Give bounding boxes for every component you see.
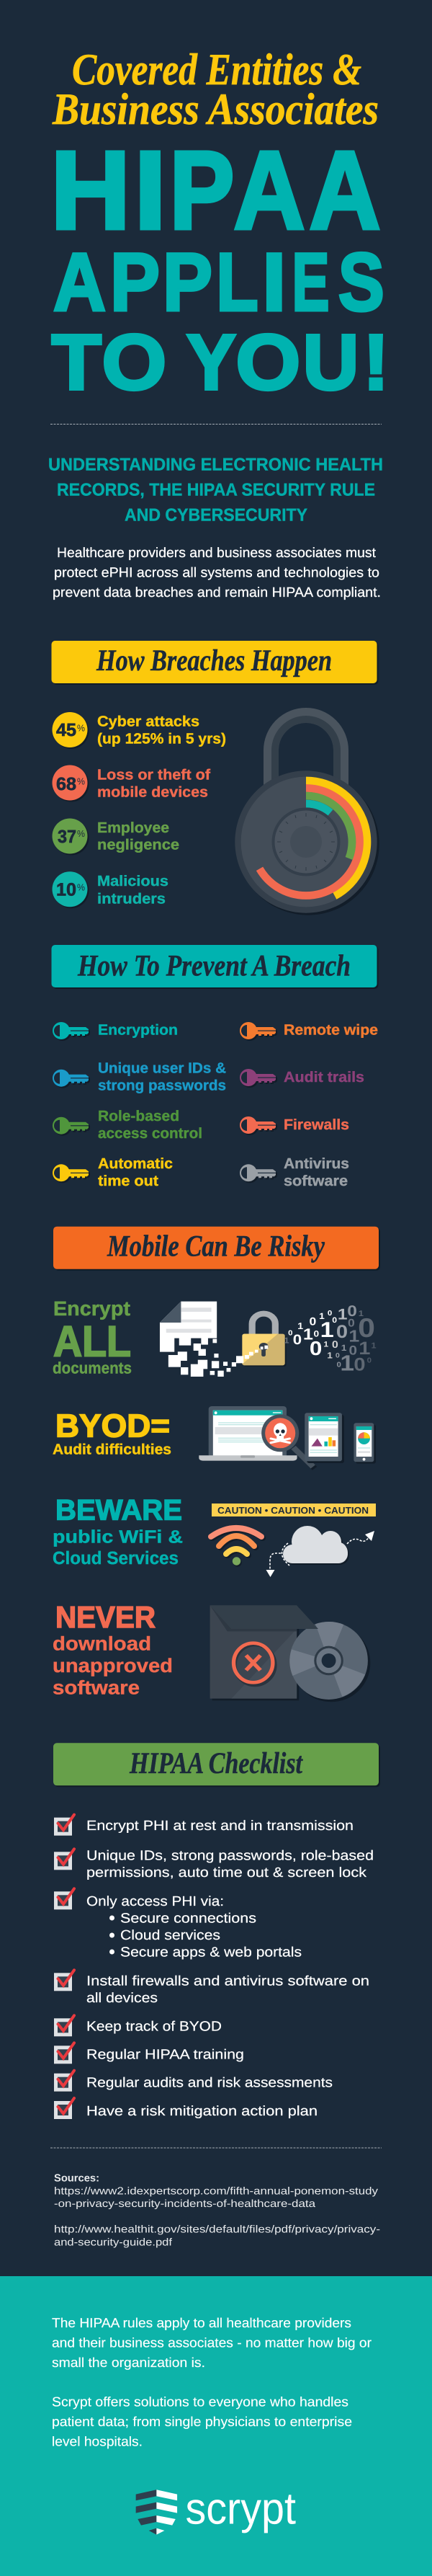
line: APPLIES: I <box>262 236 287 329</box>
line: HIPAA: H <box>50 128 130 252</box>
banner: mobile can be risky: Mobile Can Be Risky <box>107 1230 325 1263</box>
sources: and-security-guide.pdf <box>54 2237 173 2248</box>
text: beware public wifi and cloud services <box>53 1495 183 1568</box>
line: HIPAA: A <box>310 128 380 252</box>
checklist item: mitigation plan: Have a risk mitigation action plan <box>86 2104 318 2119</box>
caution band: CAUTION • CAUTION • CAUTION <box>217 1505 369 1516</box>
line: HIPAA <box>50 128 380 252</box>
checklist item: only access PHI via: Secure connections <box>120 1911 256 1926</box>
footer text: The HIPAA rules apply to all healthcare providers <box>52 2315 351 2330</box>
icon: wifi signal <box>211 1528 263 1567</box>
checklist item: firewalls and antivirus: Install firewalls and antivirus software on <box>86 1973 369 1989</box>
intro paragraph: Healthcare providers and business associates must <box>57 546 377 561</box>
stat: loss or theft 68%: % <box>77 776 85 787</box>
stat: employee negligence 37%: negligence <box>97 837 179 853</box>
sources: https://www2.idexpertscorp.com/fifth-annual-ponemon-study <box>54 2185 379 2197</box>
binary digits: 1 <box>341 1343 346 1353</box>
icon: document turning into encrypted binary <box>160 1302 377 1377</box>
binary digits: 0 <box>354 1354 366 1374</box>
binary digits: 0 <box>367 1356 372 1364</box>
key item: encryption <box>53 1021 178 1041</box>
binary digits: 1 <box>303 1325 313 1343</box>
cloud shape <box>284 1527 349 1565</box>
box <box>210 1605 299 1700</box>
line: APPLIES: S <box>338 236 384 329</box>
text: beware public wifi and cloud services: Cloud Services <box>53 1548 179 1568</box>
checklist item: audits <box>54 2071 333 2092</box>
binary digits <box>284 1302 377 1375</box>
subtitle: UNDERSTANDING ELECTRONIC HEALTH <box>48 455 383 474</box>
checklist item: audits: Regular audits and risk assessments <box>86 2076 333 2091</box>
binary digits: 0 <box>358 1313 375 1343</box>
binary digits: 1 <box>348 1327 359 1346</box>
box flap <box>210 1605 318 1629</box>
intro paragraph: protect ePHI across all systems and technologies to <box>54 565 379 581</box>
binary digits: 1 <box>320 1318 334 1342</box>
text: never download unapproved software: download <box>53 1633 151 1654</box>
sources: Sources: <box>54 2173 99 2185</box>
stat: employee negligence 37% <box>52 819 179 855</box>
checklist item: unique IDs: Unique IDs, strong passwords, role-based <box>86 1849 374 1864</box>
key item: remote wipe <box>240 1021 378 1041</box>
key item: remote wipe: Remote wipe <box>284 1021 378 1038</box>
intro paragraph: prevent data breaches and remain HIPAA compliant. <box>53 585 381 600</box>
line: TO YOU! <box>52 319 389 407</box>
banner: mobile can be risky <box>53 1227 380 1271</box>
stat: malicious intruders 10%: 10 <box>56 880 76 900</box>
key item: unique user IDs <box>53 1060 226 1094</box>
magnifier with skull <box>261 1414 315 1468</box>
checklist item: training <box>54 2043 244 2064</box>
checklist item: only access PHI via: Secure apps & web portals <box>120 1945 302 1960</box>
line: APPLIES: L <box>216 236 258 329</box>
text: BYOD audit difficulties <box>53 1407 171 1458</box>
key item: role-based access control <box>53 1108 202 1142</box>
binary digits: 1 <box>340 1351 354 1375</box>
binary digits: 1 <box>338 1305 348 1323</box>
binary digits: 0 <box>288 1329 293 1337</box>
line: HIPAA: P <box>170 128 235 252</box>
stat: malicious intruders 10%: % <box>77 882 85 893</box>
checklist item: only access PHI via: Cloud services <box>120 1928 220 1943</box>
checklist item: only access PHI via <box>54 1888 302 1960</box>
footer text: level hospitals. <box>52 2433 143 2448</box>
sources <box>54 2173 380 2248</box>
stat: cyber attacks 45% <box>52 712 226 749</box>
logo: scrypt shield <box>136 2490 177 2535</box>
line: TO YOU!: ! <box>363 319 389 407</box>
disc <box>289 1622 370 1702</box>
banner: how breaches happen: How Breaches Happen <box>96 644 332 678</box>
key item: automatic time out: Automatic <box>98 1155 173 1172</box>
key item: unique user IDs: Unique user IDs & <box>98 1060 226 1077</box>
checklist item: firewalls and antivirus: all devices <box>86 1991 158 2006</box>
pixels over padlock <box>236 1346 268 1363</box>
icon: padlock with breach arcs <box>235 716 379 915</box>
binary digits: 0 <box>310 1338 322 1359</box>
key item: audit trails <box>240 1069 364 1088</box>
banner: HIPAA checklist: HIPAA Checklist <box>129 1747 303 1780</box>
stat: malicious intruders 10%: Malicious <box>97 873 168 889</box>
text: beware public wifi and cloud services: public WiFi & <box>53 1527 183 1547</box>
checklist item: encrypt PHI: Encrypt PHI at rest and in transmission <box>86 1818 354 1834</box>
title: covered entities and business associates <box>52 45 379 134</box>
banner: how to prevent a breach: How To Prevent A Breach <box>77 949 351 982</box>
footer text: Scrypt offers solutions to everyone who handles <box>52 2394 348 2410</box>
stat: loss or theft 68%: Loss or theft of <box>97 766 210 783</box>
key item: antivirus software: Antivirus <box>284 1155 349 1172</box>
icon: laptop tablet phone with skull magnifier <box>199 1406 376 1468</box>
breach percentage arcs <box>259 781 367 896</box>
key item: role-based access control: access control <box>98 1125 202 1142</box>
binary digits: 1 <box>327 1350 333 1360</box>
sources: http://www.healthit.gov/sites/default/files/pdf/privacy/privacy- <box>54 2224 380 2236</box>
stat: malicious intruders 10% <box>52 871 168 908</box>
footer text <box>52 2315 372 2448</box>
line: TO YOU!: U <box>302 319 359 407</box>
shredded document <box>160 1302 217 1352</box>
title: covered entities and business associates: Covered Entities & <box>72 45 361 94</box>
binary digits: 0 <box>309 1315 316 1328</box>
title: covered entities and business associates: Business Associates <box>52 85 379 134</box>
key item: firewalls: Firewalls <box>284 1116 349 1133</box>
pixel fragments <box>168 1339 236 1377</box>
stat: cyber attacks 45%: 45 <box>56 720 76 740</box>
key item: automatic time out <box>53 1155 173 1189</box>
stat: employee negligence 37%: % <box>77 828 85 839</box>
icon: software box and disc <box>210 1605 370 1702</box>
sources: -on-privacy-security-incidents-of-healthcare-data <box>54 2198 316 2210</box>
key item: audit trails: Audit trails <box>284 1069 364 1085</box>
line: HIPAA: I <box>134 128 166 252</box>
key item: antivirus software: software <box>284 1173 348 1189</box>
stat: loss or theft 68%: mobile devices <box>97 784 208 800</box>
stat: loss or theft 68% <box>52 765 210 801</box>
binary digits: 0 <box>332 1338 338 1350</box>
checklist item: unique IDs: permissions, auto time out & screen lock <box>86 1865 367 1880</box>
binary digits: 0 <box>314 1328 319 1338</box>
line: APPLIES <box>53 236 384 329</box>
tablet <box>305 1413 344 1463</box>
stat: employee negligence 37%: Employee <box>97 820 169 836</box>
footer text: and their business associates - no matter how big or <box>52 2335 372 2350</box>
x mark badge <box>234 1643 275 1685</box>
binary digits: 1 <box>359 1309 364 1318</box>
text: BYOD audit difficulties: BYOD= <box>55 1407 170 1444</box>
banner: how to prevent a breach <box>52 945 379 989</box>
binary digits: 1 <box>323 1340 328 1349</box>
laptop <box>199 1406 297 1461</box>
icon: cloud with dashed arrows <box>266 1526 374 1577</box>
text: encrypt all documents: documents <box>53 1359 132 1377</box>
checklist item: only access PHI via: Only access PHI via: <box>86 1894 224 1909</box>
stat: employee negligence 37%: 37 <box>58 827 76 847</box>
binary digits: 1 <box>319 1311 325 1321</box>
binary digits: 0 <box>332 1315 337 1324</box>
line: APPLIES: P <box>163 236 212 329</box>
binary digits: 0 <box>336 1321 348 1342</box>
key item: automatic time out: time out <box>98 1173 158 1189</box>
subtitle <box>48 455 383 525</box>
binary digits: 0 <box>347 1302 357 1320</box>
checklist item: unique IDs <box>54 1849 374 1880</box>
banner: HIPAA checklist <box>53 1743 380 1787</box>
stat: loss or theft 68%: 68 <box>56 774 76 794</box>
line: TO YOU!: T <box>52 319 102 407</box>
line: APPLIES: E <box>292 236 330 329</box>
stat: cyber attacks 45%: Cyber attacks <box>97 714 199 730</box>
stat: cyber attacks 45%: (up 125% in 5 yrs) <box>97 731 226 747</box>
text: BYOD audit difficulties: Audit difficulties <box>53 1442 171 1458</box>
shackle <box>271 716 341 793</box>
line: TO YOU!: Y <box>186 319 236 407</box>
text: encrypt all documents: ALL <box>53 1318 131 1366</box>
text: never download unapproved software: unapproved <box>53 1655 173 1676</box>
key item: antivirus software <box>240 1155 349 1189</box>
key item: unique user IDs: strong passwords <box>98 1078 226 1094</box>
padlock <box>242 1314 287 1367</box>
subtitle: AND CYBERSECURITY <box>125 506 307 525</box>
logo: scrypt wordmark: scrypt <box>186 2484 296 2534</box>
banner: how breaches happen <box>52 641 379 685</box>
title: HIPAA applies to you <box>50 128 389 407</box>
binary digits: 1 <box>371 1341 377 1350</box>
binary digits: 0 <box>337 1361 341 1369</box>
key item: role-based access control: Role-based <box>98 1108 179 1124</box>
checklist item: firewalls and antivirus <box>54 1970 369 2006</box>
binary digits: 0 <box>348 1343 357 1357</box>
phone <box>354 1423 376 1464</box>
checklist item: encrypt PHI <box>54 1815 354 1836</box>
binary digits: 1 <box>284 1336 289 1345</box>
line: HIPAA: A <box>233 128 305 252</box>
intro paragraph <box>53 546 381 600</box>
line: APPLIES: P <box>110 236 160 329</box>
stat: malicious intruders 10%: intruders <box>97 890 166 907</box>
text: never download unapproved software: NEVER <box>55 1600 156 1634</box>
line: TO YOU!: O <box>235 319 300 407</box>
binary digits: 0 <box>348 1317 355 1329</box>
key item: firewalls <box>240 1116 349 1135</box>
footer panel <box>0 2276 432 2576</box>
key item: encryption: Encryption <box>98 1021 178 1038</box>
checklist item: mitigation plan <box>54 2098 318 2119</box>
text: encrypt all documents <box>53 1297 132 1377</box>
text: never download unapproved software <box>53 1600 173 1699</box>
line: APPLIES: A <box>53 236 106 329</box>
binary digits: 0 <box>336 1351 340 1359</box>
checklist item: BYOD <box>54 2015 222 2036</box>
subtitle: RECORDS, THE HIPAA SECURITY RULE <box>57 481 375 500</box>
checklist item: training: Regular HIPAA training <box>86 2048 244 2063</box>
text: never download unapproved software: software <box>53 1677 140 1699</box>
binary digits: 0 <box>328 1309 332 1317</box>
binary digits: 1 <box>297 1321 303 1331</box>
binary digits: 0 <box>293 1332 302 1347</box>
line: TO YOU!: O <box>102 319 166 407</box>
stat: cyber attacks 45%: % <box>77 722 85 734</box>
text: beware public wifi and cloud services: BEWARE <box>55 1495 182 1527</box>
footer text: patient data; from single physicians to enterprise <box>52 2414 352 2429</box>
binary digits: 1 <box>359 1338 370 1359</box>
combination dial <box>272 807 340 876</box>
text: encrypt all documents: Encrypt <box>53 1297 130 1320</box>
checklist item: BYOD: Keep track of BYOD <box>86 2020 222 2035</box>
footer text: small the organization is. <box>52 2355 205 2370</box>
dashed arrows <box>270 1537 369 1570</box>
